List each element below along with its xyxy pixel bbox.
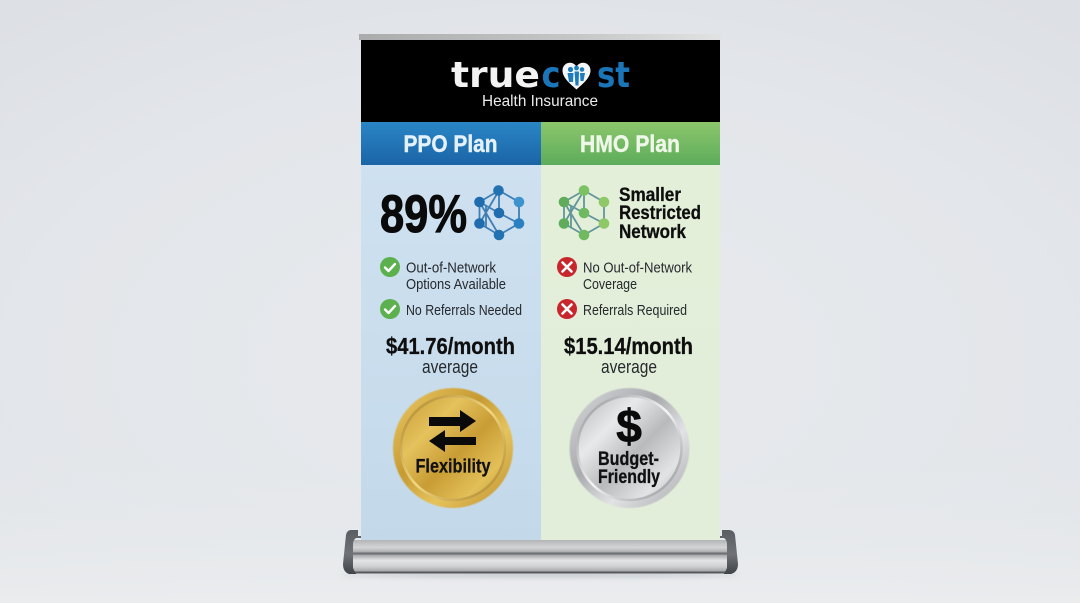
HMO heading: HMO Plan (580, 131, 680, 158)
badge label: Budget- (598, 448, 659, 470)
panel: PPO plan (361, 122, 541, 540)
badge label: Flexibility (416, 456, 491, 478)
stat: smaller restricted network: Smaller (619, 184, 681, 206)
PPO background (361, 165, 541, 540)
benefit: no referrals (380, 299, 522, 319)
PPO heading: PPO Plan (404, 131, 498, 158)
logo subtitle: Health Insurance (482, 93, 598, 110)
stat: smaller restricted network: Restricted (619, 202, 701, 224)
header: logo band (361, 40, 720, 122)
logo: truecost: st (597, 55, 630, 96)
drawback: referrals required: Referrals Required (583, 303, 687, 319)
badge: gold flexibility (393, 388, 513, 508)
stat: 89%: 89% (380, 185, 467, 244)
banner panel (361, 40, 720, 540)
badge: silver budget-friendly (570, 388, 690, 508)
stand shadow (340, 572, 740, 578)
benefit: out-of-network options (380, 257, 506, 293)
logo: truecost: c (542, 55, 560, 96)
drawback: no out-of-network: Coverage (583, 277, 637, 293)
benefit: out-of-network options: Out-of-Network (406, 260, 497, 276)
top rail (359, 34, 721, 40)
logo: truecost: true (451, 55, 540, 96)
price: HMO: $15.14/month (564, 333, 693, 359)
logo: truecost (451, 55, 630, 96)
PPO heading (361, 122, 541, 165)
HMO background (541, 165, 720, 540)
price note: PPO: average (422, 357, 478, 377)
price: PPO: $41.76/month (386, 333, 515, 359)
stat: smaller restricted network (619, 184, 701, 243)
HMO heading (541, 122, 720, 165)
drawback: no out-of-network (557, 257, 693, 293)
icon: heart with family (562, 63, 590, 90)
drawback: referrals required (557, 299, 687, 319)
icon: dollar sign: $ (616, 400, 642, 452)
benefit: no referrals: No Referrals Needed (406, 303, 522, 319)
panel: HMO plan (541, 122, 720, 540)
icon: green network (559, 185, 609, 240)
stat: smaller restricted network: Network (619, 221, 686, 243)
icon: swap arrows (429, 410, 476, 452)
badge: silver budget-friendly: Friendly (598, 466, 660, 488)
stand base (343, 530, 738, 574)
icon: blue network (474, 185, 524, 240)
price note: HMO: average (601, 357, 657, 377)
drawback: no out-of-network: No Out-of-Network (583, 260, 693, 276)
benefit: out-of-network options: Options Available (406, 277, 506, 293)
